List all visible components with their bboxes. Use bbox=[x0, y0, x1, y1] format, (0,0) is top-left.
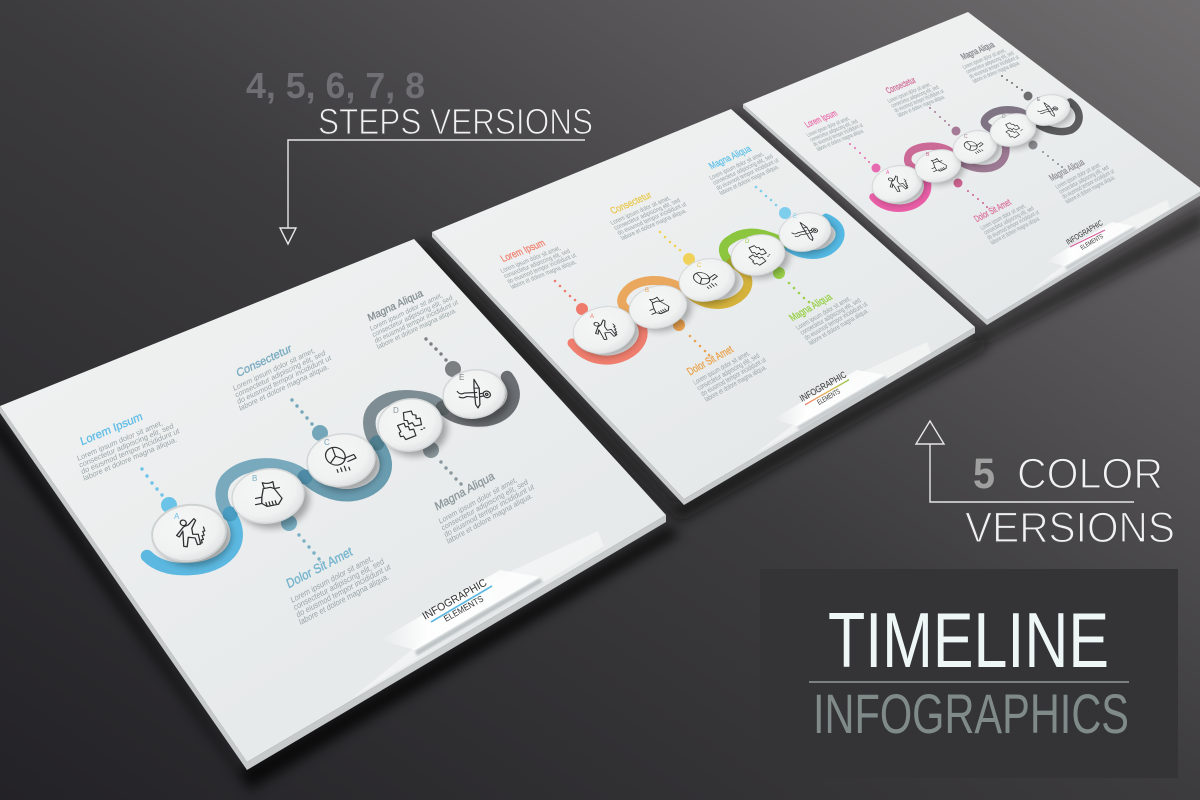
versions label: VERSIONS bbox=[965, 504, 1175, 552]
sheet shadow bbox=[725, 112, 1200, 345]
step letters: B bbox=[252, 474, 257, 483]
text: Magna Aliqua top bbox=[365, 275, 462, 351]
text: Dolor Sit Amet: labore et dolore magna aliqua. bbox=[989, 215, 1042, 247]
text: Dolor Sit Amet: consectetur adipiscing elit, sed bbox=[292, 557, 385, 612]
text: Magna Aliqua top: labore et dolore magna aliqua. bbox=[719, 164, 781, 197]
text: Lorem Ipsum: consectetur adipiscing elit, sed bbox=[809, 118, 860, 144]
text: Dolor Sit Amet: Lorem ipsum dolor sit amet, bbox=[979, 203, 1028, 232]
text: Magna Aliqua bottom: labore et dolore magna aliqua. bbox=[807, 307, 871, 347]
text: Magna Aliqua top: Lorem ipsum dolor sit amet, bbox=[708, 151, 766, 182]
text: Lorem Ipsum: Lorem Ipsum bbox=[802, 108, 840, 130]
text: Magna Aliqua top bbox=[701, 136, 784, 197]
connector: step D bbox=[423, 442, 463, 486]
text: Consectetur: consectetur adipiscing elit, sed bbox=[613, 198, 682, 232]
sheet shadow bbox=[412, 240, 985, 522]
text: Consectetur: do eiusmod tempor incididunt ut bbox=[616, 202, 689, 237]
tag: infographic elements: INFOGRAPHIC bbox=[1064, 218, 1104, 247]
step letters bbox=[886, 97, 1041, 176]
text: Magna Aliqua bottom: Magna Aliqua bbox=[1047, 157, 1087, 183]
annotation: steps versions bbox=[246, 65, 593, 244]
sheet paper bbox=[432, 109, 975, 499]
text: Lorem Ipsum bbox=[492, 230, 582, 291]
connector: step A bbox=[849, 143, 880, 172]
text: Consectetur: labore et dolore magna aliqua. bbox=[620, 208, 689, 242]
text: Dolor Sit Amet: Dolor Sit Amet bbox=[685, 344, 736, 378]
text: Lorem Ipsum bbox=[72, 398, 183, 483]
title panel bbox=[760, 569, 1178, 778]
text: Magna Aliqua bottom: Magna Aliqua bbox=[433, 470, 497, 514]
text: Magna Aliqua top: do eiusmod tempor incididunt ut bbox=[968, 54, 1021, 80]
connector: step B bbox=[281, 515, 321, 561]
step letters: A bbox=[590, 314, 594, 320]
connector: step C bbox=[659, 231, 695, 265]
step letters: C bbox=[964, 134, 968, 140]
text: Consectetur bbox=[601, 180, 692, 242]
text: Magna Aliqua bottom: Magna Aliqua bbox=[787, 291, 835, 323]
text: Magna Aliqua bottom: Lorem ipsum dolor sit amet, bbox=[1054, 162, 1103, 191]
step letters: B bbox=[645, 288, 649, 294]
text: Consectetur: Lorem ipsum dolor sit amet, bbox=[609, 195, 673, 227]
text: Dolor Sit Amet: Lorem ipsum dolor sit amet, bbox=[692, 350, 752, 387]
tag: infographic elements: INFOGRAPHIC bbox=[798, 370, 849, 405]
text: Magna Aliqua top: labore et dolore magna aliqua. bbox=[971, 60, 1022, 85]
ribbon junctions bbox=[632, 238, 790, 322]
text: Consectetur: do eiusmod tempor incididunt ut bbox=[893, 88, 946, 114]
text: Dolor Sit Amet bbox=[283, 529, 395, 627]
sheet paper bbox=[743, 12, 1200, 320]
step letters: E bbox=[459, 373, 464, 382]
text: Dolor Sit Amet bbox=[972, 189, 1045, 247]
tag strip bbox=[773, 370, 885, 426]
steps label: STEPS VERSIONS bbox=[318, 101, 593, 142]
text: Lorem Ipsum: do eiusmod tempor incididunt ut bbox=[506, 253, 578, 286]
text: Magna Aliqua bottom bbox=[785, 280, 874, 347]
text: Consectetur: consectetur adipiscing elit, sed bbox=[890, 84, 941, 110]
tag: infographic elements bbox=[1064, 218, 1105, 252]
disc C bbox=[304, 429, 384, 496]
connector: step E bbox=[424, 337, 461, 377]
tag: infographic elements: ELEMENTS bbox=[815, 387, 842, 407]
text: Magna Aliqua top: Lorem ipsum dolor sit amet, bbox=[961, 48, 1008, 71]
step letters bbox=[174, 373, 464, 521]
text: Lorem Ipsum: do eiusmod tempor incididunt ut bbox=[812, 122, 865, 148]
text: Magna Aliqua bottom: consectetur adipiscing elit, sed bbox=[799, 297, 863, 337]
text: Dolor Sit Amet: do eiusmod tempor incididunt ut bbox=[699, 356, 768, 398]
text: Dolor Sit Amet: Dolor Sit Amet bbox=[972, 197, 1014, 224]
fold band bbox=[352, 531, 604, 698]
text: Dolor Sit Amet: consectetur adipiscing elit, sed bbox=[983, 205, 1036, 237]
text: Lorem Ipsum: labore et dolore magna aliqua. bbox=[82, 435, 178, 483]
connector: step A bbox=[554, 280, 588, 315]
disc E bbox=[1023, 90, 1076, 132]
text: Magna Aliqua bottom: do eiusmod tempor incididunt ut bbox=[1061, 168, 1116, 201]
step letters: D bbox=[393, 406, 399, 415]
fold shadow bbox=[1065, 227, 1136, 270]
arrow: up to coloured versions bbox=[916, 421, 1134, 502]
text: Consectetur: do eiusmod tempor incididunt ut bbox=[236, 353, 332, 406]
text: Magna Aliqua top: consectetur adipiscing elit, sed bbox=[965, 50, 1016, 76]
tag: infographic elements: ELEMENTS bbox=[1079, 233, 1105, 252]
colour count: 5 bbox=[973, 450, 995, 498]
disc E bbox=[440, 365, 514, 428]
sheet paper bbox=[0, 239, 666, 762]
disc A bbox=[569, 300, 644, 363]
step letters: C bbox=[324, 438, 330, 447]
connector: step C bbox=[929, 107, 960, 136]
text: Dolor Sit Amet: do eiusmod tempor incididunt ut bbox=[295, 562, 392, 620]
connector: step C bbox=[290, 398, 328, 441]
connector: step D bbox=[773, 267, 810, 303]
colour label: COLOR bbox=[1017, 450, 1163, 498]
text: Lorem Ipsum: Lorem ipsum dolor sit amet, bbox=[500, 246, 563, 275]
text: Dolor Sit Amet: Lorem ipsum dolor sit amet, bbox=[289, 554, 374, 605]
text: Lorem Ipsum: Lorem ipsum dolor sit amet, bbox=[76, 418, 164, 463]
fold band bbox=[755, 342, 931, 454]
text: Magna Aliqua bottom: do eiusmod tempor incididunt ut bbox=[443, 482, 535, 539]
text: Lorem Ipsum: labore et dolore magna aliqua. bbox=[510, 259, 578, 291]
text: Consectetur: Lorem ipsum dolor sit amet, bbox=[886, 82, 933, 105]
text: Magna Aliqua top: consectetur adipiscing elit, sed bbox=[712, 154, 775, 187]
sheet 3: pink version bbox=[725, 12, 1200, 345]
text: Magna Aliqua top: Magna Aliqua bbox=[706, 143, 753, 171]
text: Consectetur: Consectetur bbox=[235, 342, 293, 380]
text: Magna Aliqua bottom: consectetur adipiscing elit, sed bbox=[1058, 164, 1111, 196]
ribbon junctions bbox=[222, 400, 450, 522]
disc D bbox=[987, 109, 1042, 153]
disc B bbox=[229, 464, 313, 534]
step letters: E bbox=[1037, 97, 1041, 103]
disc E bbox=[776, 207, 839, 260]
fold band bbox=[1030, 200, 1170, 291]
wave ribbon bbox=[873, 102, 1079, 208]
disc B bbox=[912, 145, 967, 189]
text: Magna Aliqua top bbox=[954, 34, 1025, 85]
disc C bbox=[950, 126, 1003, 170]
text: Magna Aliqua bottom: Lorem ipsum dolor sit amet, bbox=[437, 475, 518, 526]
text: Lorem Ipsum: consectetur adipiscing elit, sed bbox=[503, 249, 572, 280]
text: Magna Aliqua bottom bbox=[1047, 148, 1120, 206]
connector: step B bbox=[954, 178, 988, 208]
text: Dolor Sit Amet: labore et dolore magna aliqua. bbox=[298, 572, 390, 627]
step letters: D bbox=[1002, 114, 1006, 120]
disc A bbox=[148, 499, 235, 572]
disc D bbox=[375, 394, 451, 461]
text: Consectetur bbox=[228, 327, 334, 413]
text: Dolor Sit Amet: consectetur adipiscing elit, sed bbox=[696, 352, 762, 393]
sheet 2: rainbow version bbox=[412, 109, 985, 522]
step letters: D bbox=[745, 239, 750, 245]
connector: step E bbox=[755, 186, 791, 219]
text: Lorem Ipsum: Lorem Ipsum bbox=[79, 411, 144, 448]
wave ribbon bbox=[572, 218, 840, 360]
text: Dolor Sit Amet: Dolor Sit Amet bbox=[284, 543, 355, 591]
text: Lorem Ipsum: consectetur adipiscing elit, sed bbox=[78, 421, 175, 470]
text: Magna Aliqua top: Lorem ipsum dolor sit amet, bbox=[369, 292, 444, 333]
text: Magna Aliqua top: labore et dolore magna aliqua. bbox=[376, 307, 458, 351]
text: Dolor Sit Amet: do eiusmod tempor incididunt ut bbox=[986, 209, 1041, 242]
text: Lorem Ipsum: Lorem Ipsum bbox=[498, 237, 547, 264]
connector: step D bbox=[1028, 140, 1063, 168]
text: Consectetur: Lorem ipsum dolor sit amet, bbox=[232, 345, 316, 393]
text: Consectetur: labore et dolore magna aliqua. bbox=[896, 94, 947, 119]
sheet 1: blue version bbox=[0, 239, 680, 790]
disc B bbox=[625, 280, 695, 337]
step letters: C bbox=[697, 263, 702, 269]
tag: infographic elements: INFOGRAPHIC bbox=[420, 577, 489, 623]
text: Lorem Ipsum: labore et dolore magna aliqua. bbox=[815, 128, 866, 153]
arrow: down to blue version bbox=[280, 140, 585, 244]
text: Magna Aliqua top: Magna Aliqua bbox=[958, 39, 997, 62]
step letters: E bbox=[793, 214, 797, 220]
fold shadow bbox=[415, 578, 543, 656]
text: Consectetur: labore et dolore magna aliqua. bbox=[238, 362, 330, 413]
text: Magna Aliqua bottom: do eiusmod tempor incididunt ut bbox=[803, 300, 870, 342]
text: Dolor Sit Amet: labore et dolore magna aliqua. bbox=[703, 364, 769, 404]
text: Magna Aliqua bottom: labore et dolore magna aliqua. bbox=[1064, 174, 1117, 206]
disc A bbox=[869, 161, 929, 210]
text: Lorem Ipsum: Lorem ipsum dolor sit amet, bbox=[805, 116, 852, 139]
text: Magna Aliqua top: Magna Aliqua bbox=[366, 288, 425, 324]
wave ribbon bbox=[147, 377, 514, 569]
text: Consectetur bbox=[879, 68, 950, 119]
step letters bbox=[590, 214, 797, 320]
text: Consectetur: Consectetur bbox=[608, 190, 654, 216]
step letters: B bbox=[926, 152, 930, 158]
text: Magna Aliqua bottom: Lorem ipsum dolor sit amet, bbox=[794, 295, 853, 332]
text: Dolor Sit Amet bbox=[684, 333, 772, 404]
disc D bbox=[727, 229, 793, 284]
sheet shadow bbox=[0, 412, 680, 790]
text: Lorem Ipsum bbox=[798, 102, 869, 153]
tag: infographic elements: ELEMENTS bbox=[442, 594, 485, 624]
text: Consectetur: consectetur adipiscing elit, sed bbox=[234, 348, 326, 400]
annotation: colour versions bbox=[916, 421, 1175, 552]
text: Consectetur: Consectetur bbox=[883, 75, 918, 96]
text: Magna Aliqua bottom bbox=[432, 454, 538, 546]
connector: step B bbox=[673, 319, 710, 356]
disc C bbox=[675, 253, 743, 310]
text: Magna Aliqua top: consectetur adipiscing elit, sed bbox=[371, 294, 454, 339]
connector: step E bbox=[1001, 75, 1032, 100]
tag strip bbox=[1046, 222, 1134, 266]
ribbon junctions bbox=[918, 118, 1040, 178]
text: Magna Aliqua top: do eiusmod tempor incididunt ut bbox=[374, 299, 459, 345]
text: Magna Aliqua bottom: consectetur adipiscing elit, sed bbox=[440, 477, 529, 533]
step letters: A bbox=[886, 170, 890, 176]
tag strip bbox=[380, 570, 540, 650]
connector: step A bbox=[140, 467, 177, 513]
fold shadow bbox=[797, 376, 887, 430]
text: Magna Aliqua top: do eiusmod tempor incididunt ut bbox=[715, 158, 781, 192]
steps count: 4, 5, 6, 7, 8 bbox=[246, 65, 425, 106]
tag: infographic elements bbox=[798, 370, 849, 407]
heading: timeline: TIMELINE bbox=[828, 596, 1109, 684]
text: Lorem Ipsum: do eiusmod tempor incididunt ut bbox=[80, 426, 181, 476]
text: Magna Aliqua bottom: labore et dolore magna aliqua. bbox=[445, 491, 534, 546]
step letters: A bbox=[174, 512, 180, 521]
